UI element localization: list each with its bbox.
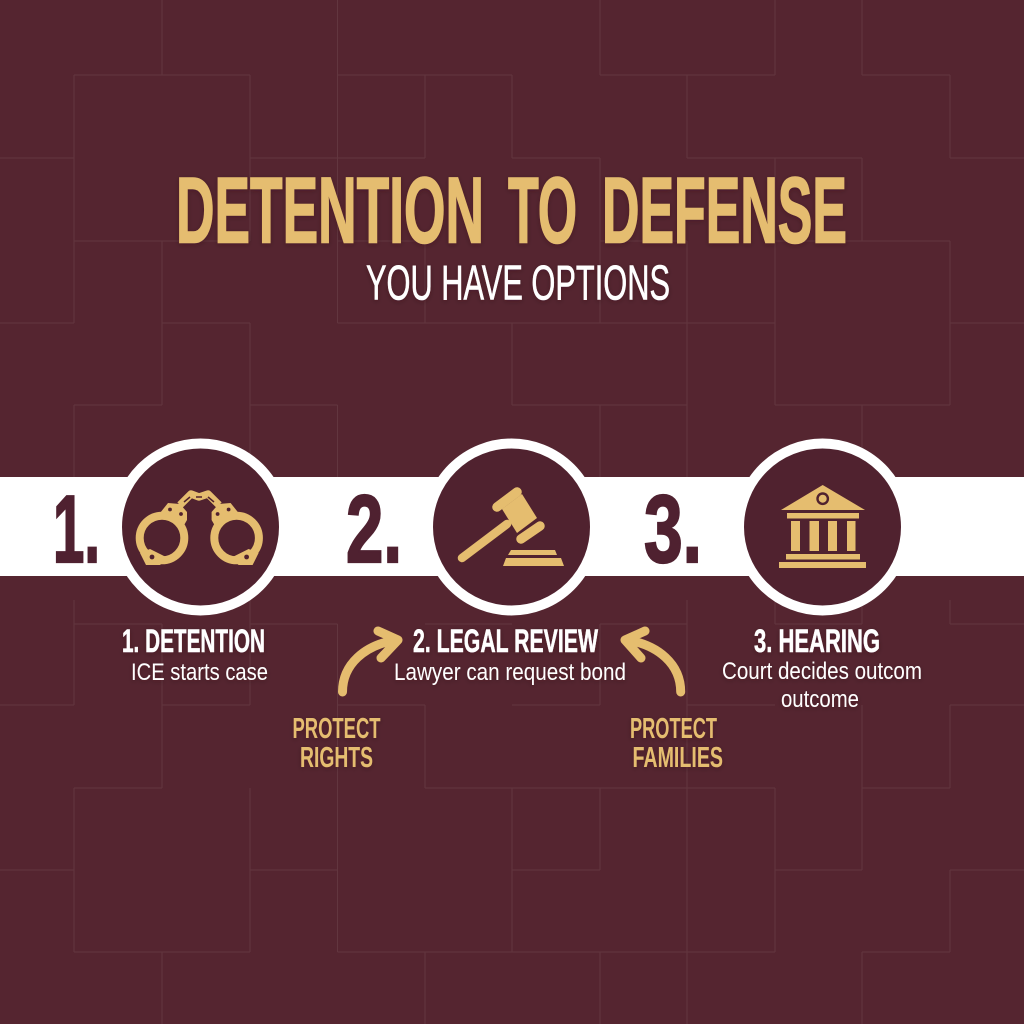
circle: hearing	[739, 444, 906, 610]
subtitle: YOU HAVE OPTIONS	[366, 256, 670, 310]
icon: courthouse	[779, 485, 866, 568]
step 3 label	[722, 623, 922, 713]
arrow: protect families to legal review	[625, 631, 681, 692]
white timeline band	[0, 477, 1024, 576]
callout: protect families: FAMILIES	[632, 742, 723, 774]
circle: legal review	[428, 444, 595, 610]
step 1 label: 1. DETENTION	[122, 623, 265, 659]
icon: handcuffs	[140, 494, 259, 565]
icon: gavel	[462, 492, 564, 566]
callout: protect rights	[292, 713, 381, 774]
callout: protect rights: PROTECT	[292, 713, 381, 745]
title: DETENTION	[176, 158, 484, 262]
step 3 label: 3. HEARING	[754, 623, 880, 659]
step 1 numeral: 1.	[53, 476, 100, 583]
title: TO	[508, 158, 577, 262]
callout: protect families: PROTECT	[630, 713, 717, 745]
step 3 numeral: 3.	[644, 476, 702, 583]
step 2 label: 2. LEGAL REVIEW	[413, 623, 599, 659]
circle: detention	[117, 444, 284, 610]
step 3 label: outcome	[781, 686, 859, 713]
step 1 label	[122, 623, 268, 686]
step 2 label: Lawyer can request bond	[394, 659, 626, 686]
step 2 numeral: 2.	[346, 476, 402, 583]
step 1 label: ICE starts case	[131, 659, 268, 686]
step 3 label: Court decides outcom	[722, 658, 922, 685]
callout: protect families	[630, 713, 723, 774]
step 2 label	[394, 623, 626, 686]
arrow: protect rights to legal review	[342, 631, 398, 692]
callout: protect rights: RIGHTS	[300, 742, 373, 774]
